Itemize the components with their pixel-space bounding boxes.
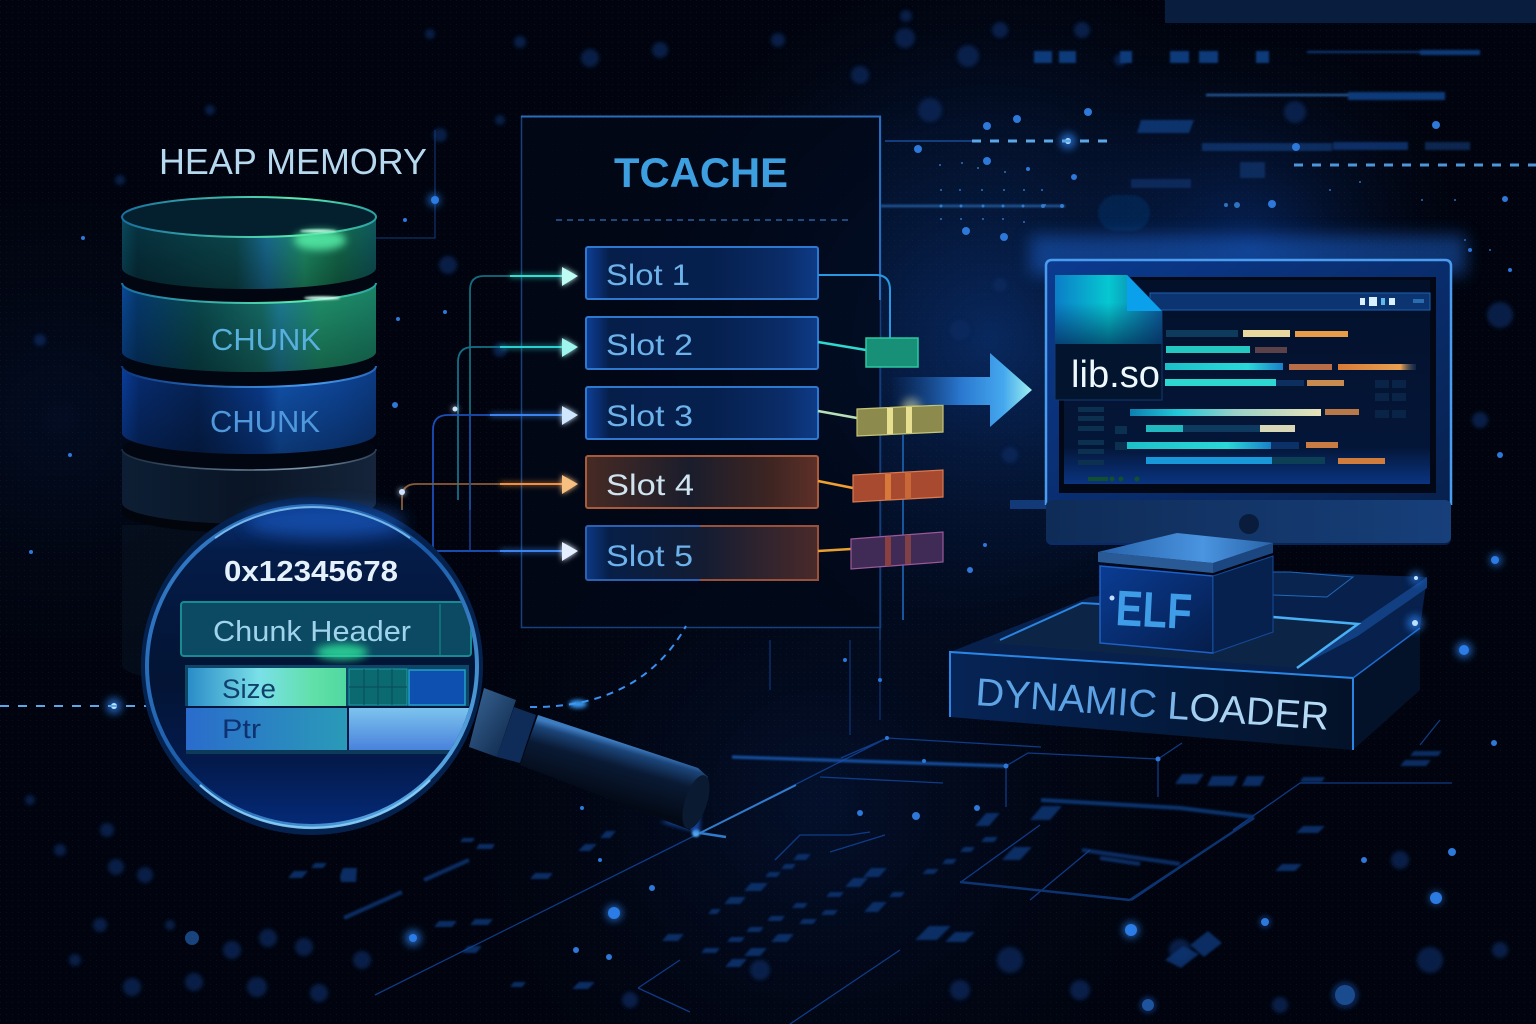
memory block yellow — [857, 398, 943, 436]
elf box — [1098, 533, 1273, 653]
slot 4: Slot 4 — [606, 469, 694, 502]
slot 1 — [586, 247, 818, 299]
slot 3: Slot 3 — [606, 400, 693, 433]
arrow heads — [399, 267, 578, 561]
glowing arrow lines — [490, 276, 565, 551]
glowing particles — [0, 133, 1536, 946]
disk 4 dark — [122, 428, 376, 533]
elf box: ELF — [1114, 580, 1193, 640]
disk 5 faint — [122, 525, 376, 686]
incoming connector lines — [402, 276, 565, 551]
lib.so file icon: lib.so — [1071, 354, 1160, 396]
ptr field: Ptr — [222, 714, 261, 744]
magnifying glass — [141, 497, 483, 835]
large arrow to lib.so — [880, 353, 1032, 427]
slot 1: Slot 1 — [606, 259, 690, 292]
slot 4 — [586, 456, 818, 508]
heap memory title: HEAP MEMORY — [159, 141, 427, 182]
tcache heading: TCACHE — [614, 149, 788, 196]
disk 2 green chunk — [122, 263, 376, 372]
memory block purple — [851, 532, 943, 569]
magnifier handle — [469, 688, 715, 833]
chunk header bar — [181, 602, 471, 660]
lib.so file icon — [1055, 275, 1162, 400]
size field: Size — [222, 674, 276, 704]
dynamic loader platform — [950, 572, 1427, 750]
memory block orange — [853, 470, 943, 502]
memory block green — [866, 338, 918, 367]
ptr field — [186, 708, 471, 754]
bottom circuit traces — [375, 130, 1452, 1024]
monitor screen — [1059, 277, 1436, 493]
slot to memory connectors — [818, 275, 903, 640]
disk 1 top — [122, 197, 376, 289]
chunk label blue: CHUNK — [210, 404, 320, 439]
slot 2: Slot 2 — [606, 329, 693, 362]
address label: 0x12345678 — [224, 556, 398, 588]
slot 5 — [586, 526, 818, 580]
chunk header bar: Chunk Header — [213, 616, 411, 648]
slot 2 — [586, 317, 818, 369]
top right data rows — [880, 50, 1480, 231]
slot 5: Slot 5 — [606, 540, 693, 573]
dashed arc to tcache — [530, 626, 686, 708]
tiny dot grid — [939, 162, 1491, 251]
heap memory cylinder stack — [122, 197, 376, 686]
dynamic loader label: DYNAMIC LOADER — [974, 671, 1331, 739]
disk 3 blue chunk — [122, 345, 376, 454]
tcache panel — [521, 116, 880, 628]
chunk label green: CHUNK — [211, 322, 321, 357]
slot 3 — [586, 387, 818, 439]
size field — [185, 665, 469, 706]
circuit blocks — [288, 751, 1442, 989]
monitor — [1010, 235, 1466, 545]
